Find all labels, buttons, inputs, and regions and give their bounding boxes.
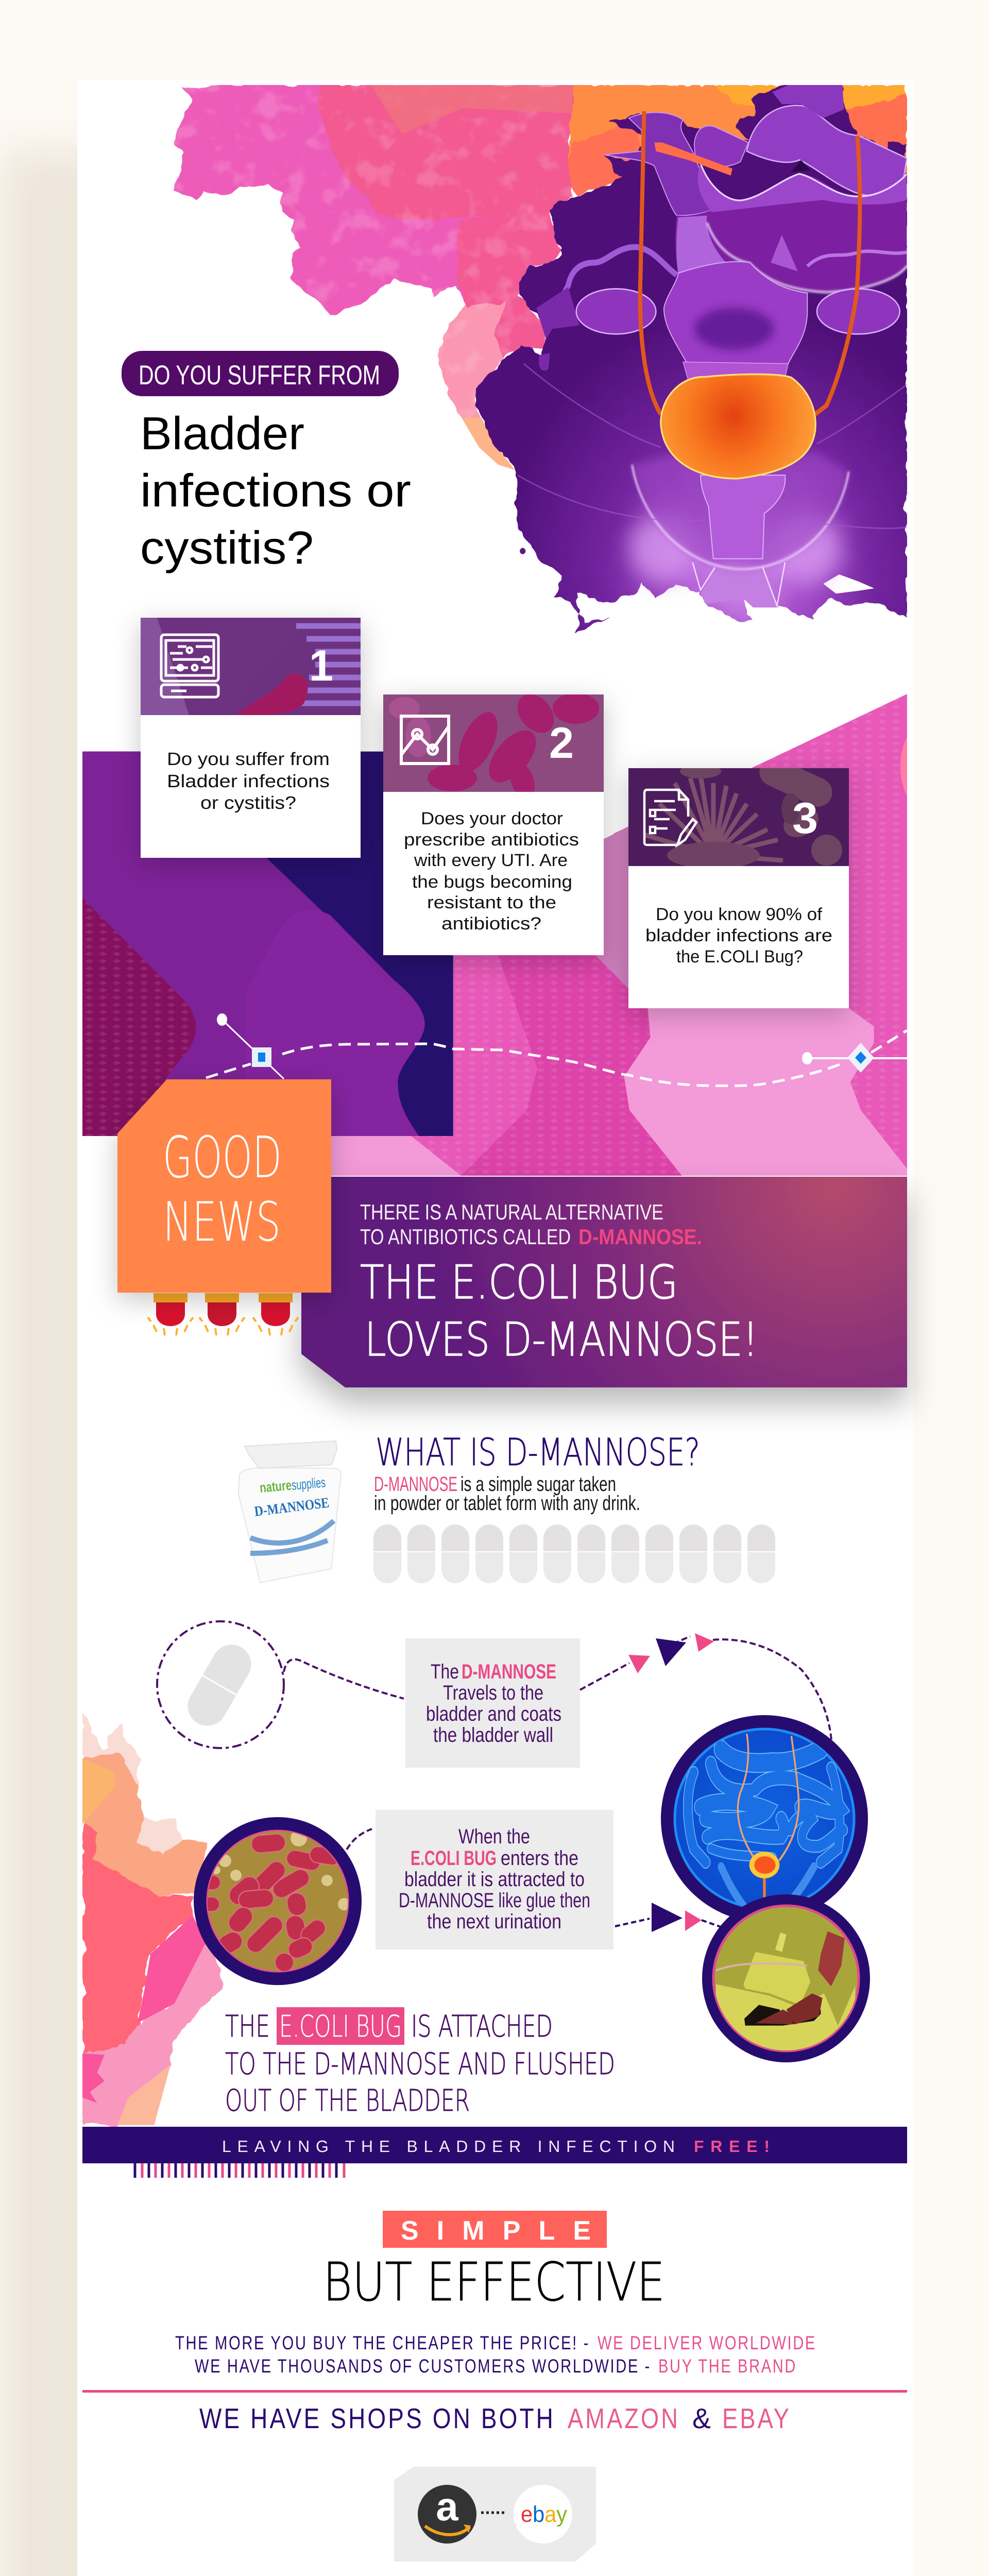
arrow: box to intestine circle	[580, 1633, 831, 1740]
light pink corner	[331, 1136, 461, 1176]
hero heading: infections or	[140, 465, 411, 517]
square node	[217, 1013, 284, 1079]
dashed route	[206, 1030, 907, 1086]
card 1 text: Do you suffer from	[167, 749, 330, 769]
bulb 2	[199, 1293, 245, 1335]
card 2 text: antibiotics?	[441, 914, 541, 934]
selling points: BUY THE BRAND	[658, 2355, 797, 2377]
urethra column	[701, 475, 785, 558]
violet diagonal band	[82, 752, 425, 1136]
bright inner arc	[707, 223, 907, 292]
banner intro text: THERE IS A NATURAL ALTERNATIVE	[360, 1200, 663, 1224]
info box: e.coli attraction: enters the	[501, 1847, 578, 1870]
peach drip	[462, 418, 515, 470]
card 3 text: the E.COLI Bug?	[676, 947, 803, 967]
info box: travels: bladder and coats	[426, 1703, 561, 1725]
card 3 text	[645, 905, 832, 967]
attached and flushed statement: E.COLI BUG	[279, 2009, 402, 2044]
shops heading: &	[692, 2402, 711, 2434]
icon: line chart	[401, 716, 449, 764]
cell body	[743, 1952, 810, 2005]
right ovary	[817, 289, 900, 334]
icon: amazon	[418, 2484, 476, 2544]
bottle body	[238, 1468, 341, 1583]
warning bulbs	[148, 1293, 298, 1335]
connector dots	[481, 2511, 506, 2514]
d-mannose description: in powder or tablet form with any drink.	[374, 1492, 640, 1515]
bowel loop right	[747, 106, 907, 196]
left watercolor splash	[82, 1711, 222, 2125]
card 2 text: Does your doctor	[421, 809, 563, 828]
orange paint splash	[568, 85, 907, 196]
upper coral tint	[371, 85, 573, 134]
navy purple panel	[82, 752, 453, 1136]
banner headline: THE E.COLI BUG	[360, 1256, 678, 1310]
d-mannose description: D-MANNOSE	[374, 1473, 457, 1496]
hero anatomy illustration	[175, 85, 907, 631]
red bacteria circle	[194, 1817, 362, 1985]
card 2	[383, 687, 604, 955]
attached and flushed statement: THE	[225, 2009, 270, 2044]
navy result bar: FREE!	[694, 2137, 770, 2156]
d-mannose description	[374, 1473, 640, 1515]
hero heading: cystitis?	[140, 522, 314, 574]
arrow: box to yellow circle	[615, 1903, 722, 1932]
light pink wash	[82, 1938, 222, 2125]
pink divider	[82, 2390, 907, 2393]
tube inner right	[807, 251, 907, 266]
navy result bar	[82, 2127, 907, 2163]
bacteria rods	[202, 1833, 342, 1972]
shops heading: AMAZON	[568, 2402, 680, 2434]
selling points: WE HAVE THOUSANDS OF CUSTOMERS WORLDWIDE -	[195, 2355, 651, 2377]
info box: travels	[405, 1638, 580, 1768]
intestine loops	[688, 1735, 843, 1906]
number 2: 2	[549, 719, 574, 768]
card 3	[628, 753, 849, 1008]
uterus body	[664, 262, 807, 367]
info box: e.coli attraction: D-MANNOSE like glue then	[399, 1889, 590, 1912]
card 1 photo	[141, 618, 361, 716]
card 1	[141, 618, 361, 858]
icon: ebay	[514, 2485, 572, 2544]
barcode stripes	[135, 2163, 344, 2178]
good news tag: GOOD	[163, 1125, 282, 1191]
shops heading: WE HAVE SHOPS ON BOTH	[199, 2402, 555, 2434]
paint dot	[520, 548, 525, 554]
pale spores	[212, 1830, 350, 1910]
right glow	[772, 514, 842, 583]
red bodies	[756, 1993, 823, 2024]
good news banner	[301, 1177, 907, 1387]
wave band	[698, 163, 907, 212]
bottle cap	[245, 1441, 337, 1468]
left tube	[562, 247, 677, 297]
dark magenta band	[82, 898, 196, 1136]
simple label: SIMPLE	[401, 2216, 591, 2246]
banner headline	[360, 1256, 758, 1367]
icon: computer circuit	[161, 635, 218, 697]
banner intro text: TO ANTIBIOTICS CALLED	[360, 1225, 571, 1249]
pink panel	[331, 694, 907, 1176]
card 3 photo	[628, 753, 849, 869]
card 1 text: Bladder infections	[167, 771, 330, 791]
number 3: 3	[792, 794, 818, 843]
e.coli highlight	[277, 2007, 404, 2045]
card 2 photo	[383, 687, 604, 802]
hero heading: Bladder	[140, 408, 304, 460]
left ovary	[576, 289, 656, 334]
lower cell mass	[714, 1984, 857, 2056]
icon: checklist document	[644, 790, 696, 845]
cervix	[683, 362, 788, 384]
peach lower wash	[117, 2064, 170, 2125]
large central organ	[675, 175, 907, 292]
selling points	[175, 2332, 816, 2377]
dashed pill circle	[157, 1621, 284, 1748]
bowel lobe left	[694, 126, 748, 166]
left flap	[605, 112, 726, 216]
yellow-orange wash	[82, 1758, 115, 1824]
left fimbria	[536, 287, 579, 340]
intestine circle	[661, 1715, 868, 1922]
ureters	[640, 111, 860, 414]
good news tag	[117, 1079, 331, 1293]
row of tablets	[371, 1524, 778, 1584]
faint bone lines	[517, 364, 907, 528]
navy result bar: LEAVING THE BLADDER INFECTION	[222, 2137, 675, 2156]
banner intro text	[360, 1200, 702, 1249]
geometric background panels	[82, 694, 907, 1176]
bladder spot	[749, 1852, 779, 1878]
product bottle	[227, 1430, 350, 1589]
orange streak	[654, 143, 732, 176]
simple label	[383, 2211, 607, 2248]
good news tag: NEWS	[163, 1191, 281, 1253]
info box: travels: Travels to the	[443, 1682, 543, 1704]
mauve band	[595, 792, 703, 1008]
icon: ebay: ebay	[521, 2502, 567, 2527]
bulb 1	[148, 1293, 193, 1335]
attached bug	[818, 1931, 845, 1987]
card 3 text: Do you know 90% of	[656, 905, 823, 924]
pink thread	[716, 1963, 807, 1970]
yellow bacteria circle	[702, 1894, 870, 2062]
diamond node	[802, 1043, 907, 1073]
info box: travels: the bladder wall	[433, 1724, 553, 1747]
subtitle pill	[122, 351, 399, 396]
lower pink splash	[455, 204, 562, 360]
info box: travels: The	[431, 1660, 459, 1683]
connector: pill to box	[284, 1659, 404, 1699]
lavender floor	[701, 567, 779, 607]
coral blob	[319, 85, 574, 222]
dark cavity	[744, 2005, 821, 2026]
pelvic arc	[632, 465, 849, 569]
pink paint splash	[175, 85, 494, 319]
bowel top	[772, 85, 844, 118]
shops heading: EBAY	[722, 2402, 791, 2434]
peach wash	[82, 1753, 206, 1896]
cell stalk	[775, 1933, 787, 1952]
d-mannose description: is a simple sugar taken	[461, 1473, 616, 1496]
card 2 text: with every UTI. Are	[414, 851, 568, 870]
white paint gap	[823, 574, 874, 594]
card 1 text: or cystitis?	[200, 793, 296, 813]
banner intro text: D-MANNOSE.	[578, 1225, 702, 1249]
attached and flushed statement: OUT OF THE BLADDER	[225, 2083, 470, 2118]
bottle waves	[250, 1521, 334, 1553]
coral edge tint	[900, 737, 907, 796]
bladder	[661, 374, 815, 479]
card 2 text: resistant to the	[427, 893, 556, 912]
icon: amazon: a	[436, 2484, 458, 2529]
attached and flushed statement: TO THE D-MANNOSE AND FLUSHED	[225, 2046, 615, 2081]
info box: e.coli attraction: E.COLI BUG	[411, 1847, 497, 1870]
attached and flushed statement	[225, 2007, 615, 2118]
marketplace logos panel	[394, 2467, 596, 2562]
organ left highlight	[676, 216, 726, 273]
leg lines	[693, 562, 785, 606]
fold spike	[771, 235, 798, 272]
number 1: 1	[309, 641, 333, 690]
dark gap	[791, 160, 811, 172]
pale wash	[82, 1711, 206, 1893]
card 2 text: the bugs becoming	[412, 872, 572, 892]
card drop shadow	[0, 149, 814, 2576]
card 1 text	[167, 749, 330, 813]
pelvic fill	[632, 451, 849, 569]
selling points: WE DELIVER WORLDWIDE	[598, 2332, 816, 2353]
hero heading	[140, 408, 411, 574]
info box: e.coli attraction: the next urination	[427, 1910, 561, 1933]
bulb 3	[253, 1293, 298, 1335]
product bottle: supplies	[291, 1475, 326, 1493]
bottle product name: D-MANNOSE	[253, 1495, 330, 1520]
selling points: THE MORE YOU BUY THE CHEAPER THE PRICE! -	[175, 2332, 590, 2353]
card 3 text: bladder infections are	[645, 926, 832, 945]
purple anatomy mass	[478, 85, 907, 631]
card 2 text	[404, 809, 579, 934]
dashed route with nodes	[206, 1013, 907, 1086]
but effective heading: BUT EFFECTIVE	[323, 2251, 665, 2313]
coral wash	[82, 1824, 195, 2054]
light pink band	[624, 1008, 907, 1176]
subtitle pill: DO YOU SUFFER FROM	[139, 360, 380, 391]
icon: capsule	[181, 1637, 258, 1733]
info box: e.coli attraction: When the	[458, 1825, 530, 1848]
drip	[539, 353, 550, 370]
left glow	[629, 514, 699, 583]
bottle brand: nature	[259, 1478, 292, 1496]
card 2 text: prescribe antibiotics	[404, 830, 579, 850]
hot pink wash	[82, 1916, 206, 2103]
pale pink drip	[439, 301, 546, 440]
left pink wave	[461, 955, 682, 1176]
what is d-mannose heading: WHAT IS D-MANNOSE?	[376, 1431, 700, 1475]
attached and flushed statement: IS ATTACHED	[411, 2009, 553, 2044]
info box: e.coli attraction	[376, 1810, 613, 1950]
info box: travels: D-MANNOSE	[462, 1660, 556, 1683]
connector: bacteria to box	[347, 1829, 372, 1850]
banner headline: LOVES D-MANNOSE!	[365, 1313, 758, 1367]
info box: e.coli attraction: bladder it is attracted to	[404, 1868, 585, 1891]
